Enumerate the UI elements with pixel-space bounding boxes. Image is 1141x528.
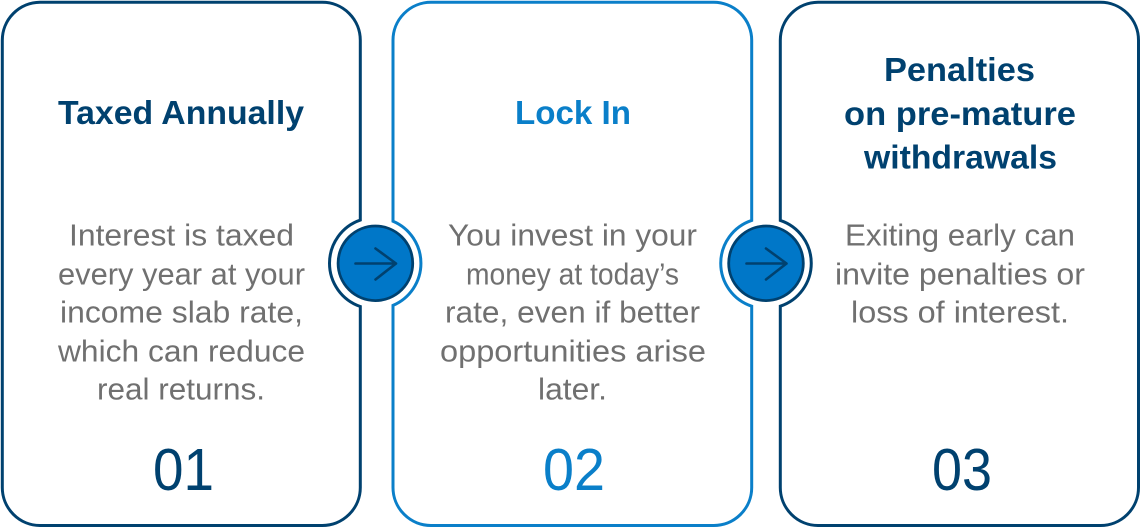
heading 3 bbox=[844, 51, 1076, 176]
heading 3: Penalties bbox=[884, 51, 1035, 88]
body text 2: later. bbox=[538, 372, 607, 406]
number 03: 03 bbox=[932, 437, 992, 503]
body text 2: money at today’s bbox=[466, 256, 679, 292]
heading 2: Lock In bbox=[515, 94, 631, 131]
heading 1: Taxed Annually bbox=[58, 94, 305, 131]
card outline 2 bbox=[393, 2, 752, 526]
arrow: step 1 to 2 bbox=[338, 226, 413, 301]
body text 1: every year at your bbox=[58, 256, 305, 292]
body text 2: opportunities arise bbox=[440, 334, 706, 368]
body text 2: You invest in your bbox=[448, 218, 697, 252]
body text 3: invite penalties or bbox=[835, 256, 1085, 292]
body text 2 bbox=[440, 218, 706, 406]
body text 1: Interest is taxed bbox=[69, 218, 294, 252]
body text 1: which can reduce bbox=[57, 334, 305, 368]
body text 2: rate, even if better bbox=[445, 294, 700, 330]
panel: penalties bbox=[780, 2, 1139, 526]
panel: taxed annually bbox=[2, 2, 360, 526]
card outline 1 bbox=[2, 2, 360, 526]
heading 3: withdrawals bbox=[863, 138, 1057, 176]
body text 3: loss of interest. bbox=[851, 294, 1069, 330]
number 01: 01 bbox=[153, 437, 214, 503]
body text 3 bbox=[835, 218, 1085, 330]
body text 3: Exiting early can bbox=[845, 218, 1075, 252]
card outline 3 bbox=[780, 2, 1139, 526]
body text 1: real returns. bbox=[97, 372, 265, 406]
heading 3: on pre-mature bbox=[844, 95, 1076, 132]
body text 1 bbox=[57, 218, 305, 406]
panel: lock in bbox=[393, 2, 752, 526]
body text 1: income slab rate, bbox=[60, 294, 303, 330]
arrow: step 2 to 3 bbox=[729, 226, 803, 301]
number 02: 02 bbox=[543, 437, 605, 503]
